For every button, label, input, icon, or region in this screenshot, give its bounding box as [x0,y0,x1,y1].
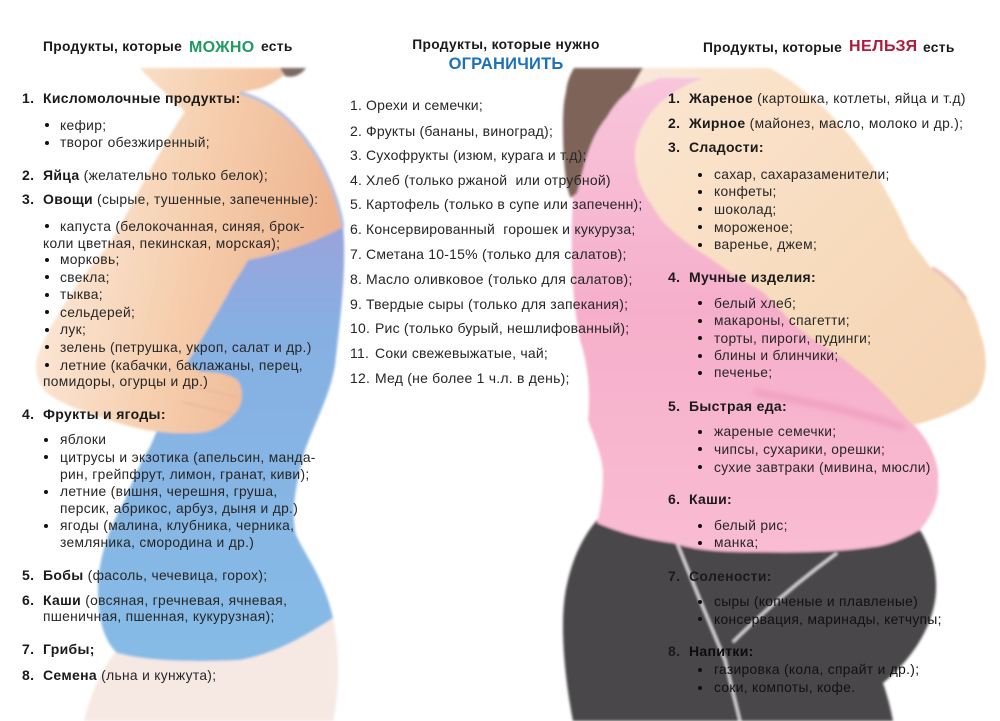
text column: forbidden foods list: консервация, маринады, кетчупы; [714,612,942,627]
text column: limited foods list: Консервированный горошек и кукуруза; [366,221,635,237]
overweight figure hand [932,268,966,300]
heading: forbidden foods: НЕЛЬЗЯ [849,38,918,55]
text column: allowed foods list: Фрукты и ягоды: [43,406,166,422]
slim figure hair [280,68,306,77]
slim figure blue top [98,225,344,661]
heading: forbidden foods: Продукты, которые [703,40,842,55]
text column: limited foods list: Фрукты (бананы, виноград); [366,123,553,139]
text column: allowed foods list: коли цветная, пекинская, морская); [43,236,280,251]
text column: forbidden foods list: мороженое; [714,220,793,235]
figure: overweight woman in pink top [563,68,986,721]
text column: limited foods list: Сухофрукты (изюм, курага и т.д); [366,147,587,163]
text column: allowed foods list: кефир; [60,118,106,133]
text column: allowed foods list [22,90,318,683]
text column: forbidden foods list: соки, компоты, кофе. [714,680,855,695]
text column: allowed foods list: Грибы; [43,641,95,657]
text column: limited foods list: 4. [350,172,362,188]
text column: forbidden foods list: блины и блинчики; [714,348,839,363]
text column: limited foods list: Соки свежевыжатые, чай; [375,345,548,361]
text column: allowed foods list: свекла; [60,270,110,285]
slim figure skin and arm [36,68,343,433]
heading: limited foods [412,37,600,73]
text column: allowed foods list: Кисломолочные продукты: [43,90,241,106]
text column: limited foods list: Хлеб (только ржаной или отрубной) [366,172,611,188]
overweight figure top fold [754,392,905,428]
text column: forbidden foods list: жареные семечки; [714,424,836,439]
text column: limited foods list: Орехи и семечки; [366,97,483,113]
text column: allowed foods list: тыква; [60,287,103,302]
text column: forbidden foods list: шоколад; [714,202,776,217]
text column: allowed foods list: 6. [22,592,34,608]
slim figure trousers [84,618,338,721]
text column: allowed foods list: лук; [60,322,86,337]
text column: forbidden foods list: манка; [714,535,759,550]
heading: allowed foods [43,39,293,56]
slim figure strap [240,93,343,227]
text column: forbidden foods list: сыры (копченые и плавленые) [714,594,918,609]
text column: forbidden foods list [668,90,966,695]
text column: forbidden foods list: белый рис; [714,518,788,533]
text column: allowed foods list: Овощи (сырые, тушенные, запеченные): [43,191,318,207]
text column: limited foods list: 9. [350,296,362,312]
overweight figure hair [563,68,643,198]
heading: forbidden foods: есть [923,40,955,55]
text column: allowed foods list: рин, грейпфрут, лимон, гранат, киви); [60,467,310,482]
heading: allowed foods: Продукты, которые [43,39,182,54]
text column: allowed foods list: летние (кабачки, баклажаны, перец, [60,358,303,373]
text column: allowed foods list: 8. [22,667,34,683]
text column: forbidden foods list: 6. [668,491,680,507]
text column: forbidden foods list: белый хлеб; [714,296,796,311]
text column: limited foods list: 6. [350,221,362,237]
heading: forbidden foods [703,38,955,55]
text column: forbidden foods list: Жирное (майонез, масло, молоко и др.); [688,115,963,131]
text column: limited foods list: 2. [350,123,362,139]
text column: forbidden foods list: макароны, спагетти; [714,313,850,328]
text column: limited foods list: 8. [350,271,362,287]
text column: allowed foods list: земляника, смородина и др.) [60,535,254,550]
text column: allowed foods list: цитрусы и экзотика (апельсин, манда- [60,450,316,465]
text column: allowed foods list: помидоры, огурцы и др.) [43,374,208,389]
text column: allowed foods list: 2. [22,167,34,183]
text column: allowed foods list: сельдерей; [60,305,135,320]
text column: forbidden foods list: Сладости: [689,139,764,155]
text column: limited foods list: 3. [350,147,362,163]
overweight figure pink top [572,68,938,552]
text column: forbidden foods list: варенье, джем; [714,237,817,252]
text column: limited foods list: Твердые сыры (только для запекания); [366,296,628,312]
text column: allowed foods list: 4. [22,406,34,422]
heading: limited foods: Продукты, которые нужно [412,37,600,52]
text column: allowed foods list: Семена (льна и кунжута); [43,667,216,683]
text column: forbidden foods list: чипсы, сухарики, орешки; [714,442,885,457]
overweight figure dark trousers [563,520,936,721]
text column: limited foods list: 7. [350,246,362,262]
heading: allowed foods: МОЖНО [189,39,255,56]
text column: allowed foods list: персик, абрикос, арбуз, дыня и др.) [60,501,298,516]
overweight figure skin and arm [635,68,986,425]
text column: allowed foods list: ягоды (малина, клубника, черника, [60,518,294,533]
text column: forbidden foods list: 7. [668,568,680,584]
text column: forbidden foods list: торты, пироги, пудинги; [714,331,871,346]
measuring tape [677,543,837,721]
text column: allowed foods list: 3. [22,191,34,207]
text column: limited foods list: Рис (только бурый, нешлифованный); [375,320,629,336]
figure: slim woman in blue top [36,68,344,721]
text column: forbidden foods list: 4. [668,269,680,285]
heading: allowed foods: есть [261,39,293,54]
text column: allowed foods list: 5. [22,567,34,583]
text column: allowed foods list: Яйца (желательно только белок); [43,167,268,183]
text column: limited foods list: 12. [350,370,370,386]
text column: limited foods list: 5. [350,196,362,212]
text column: forbidden foods list: сухие завтраки (мивина, мюсли) [714,460,931,475]
text column: forbidden foods list: газировка (кола, спрайт и др.); [714,662,919,677]
slim figure fingers [182,386,236,414]
text column: limited foods list: 11. [350,345,369,361]
text column: forbidden foods list: Солености: [689,568,772,584]
text column: allowed foods list: 1. [22,90,34,106]
text column: forbidden foods list: Жареное (картошка, котлеты, яйца и т.д) [688,90,966,106]
text column: limited foods list: Сметана 10-15% (только для салатов); [366,246,627,262]
text column: limited foods list: Мед (не более 1 ч.л. в день); [375,370,570,386]
text column: forbidden foods list: Напитки: [689,643,754,659]
text column: allowed foods list: капуста (белокочанная, синяя, брок- [60,219,305,234]
text column: allowed foods list: Каши (овсяная, гречневая, ячневая, [43,592,287,608]
text column: forbidden foods list: сахар, сахаразаменители; [714,167,890,182]
text column: forbidden foods list: 8. [668,643,680,659]
overweight figure neck [630,68,770,90]
text column: limited foods list [350,97,643,386]
text column: forbidden foods list: Мучные изделия: [689,269,816,285]
text column: limited foods list: Масло оливковое (только для салатов); [366,271,633,287]
text column: forbidden foods list: 3. [668,139,680,155]
text column: forbidden foods list: 2. [668,115,680,131]
text column: allowed foods list: яблоки [60,432,106,447]
text column: allowed foods list: Бобы (фасоль, чечевица, горох); [43,567,267,583]
text column: forbidden foods list: печенье; [714,365,772,380]
heading: limited foods: ОГРАНИЧИТЬ [449,55,563,73]
text column: forbidden foods list: конфеты; [714,184,777,199]
text column: allowed foods list: 7. [22,641,34,657]
text column: limited foods list: 10. [350,320,370,336]
text column: allowed foods list: зелень (петрушка, укроп, салат и др.) [60,340,312,355]
text column: limited foods list: Картофель (только в супе или запеченн); [366,196,643,212]
text column: allowed foods list: летние (вишня, черешня, груша, [60,484,278,499]
text column: limited foods list: 1. [350,97,362,113]
text column: allowed foods list: творог обезжиренный; [60,135,210,150]
text column: forbidden foods list: Каши: [689,491,732,507]
text column: allowed foods list: пшеничная, пшенная, кукурузная); [43,609,275,624]
text column: forbidden foods list: 1. [668,90,680,106]
text column: forbidden foods list: 5. [668,398,680,414]
text column: forbidden foods list: Быстрая еда: [689,398,787,414]
text column: allowed foods list: морковь; [60,252,120,267]
